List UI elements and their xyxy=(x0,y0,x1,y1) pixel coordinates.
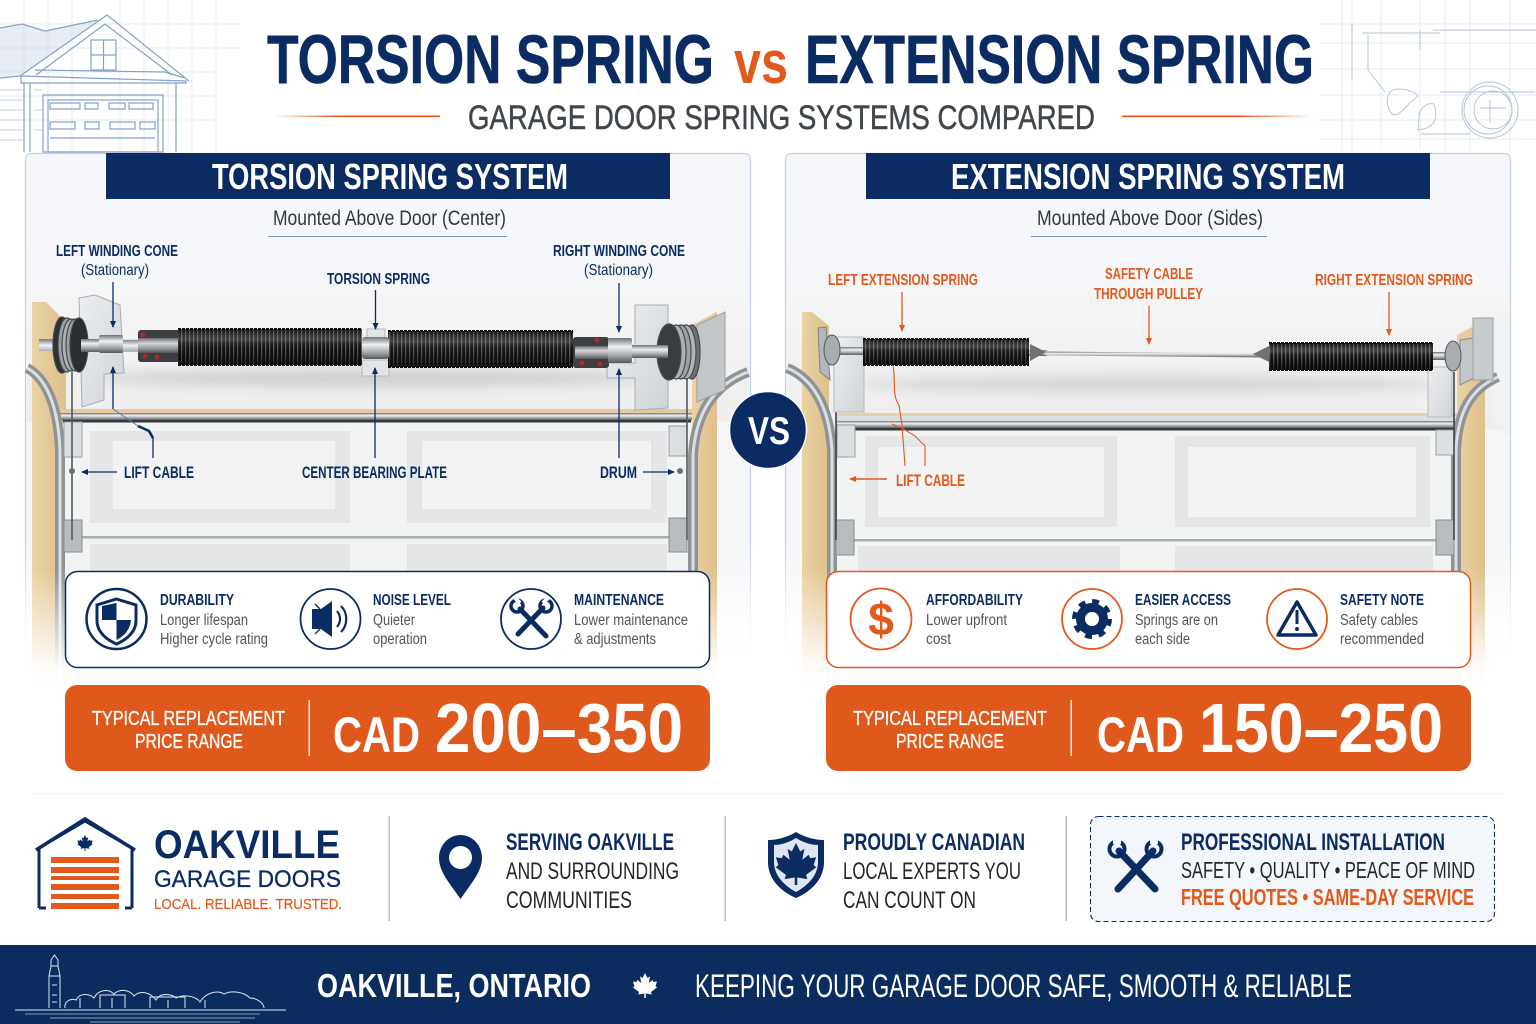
subtitle: GARAGE DOOR SPRING SYSTEMS COMPARED xyxy=(468,99,1095,137)
label: center bearing plate: CENTER BEARING PLATE xyxy=(302,464,447,482)
feature card: torsion benefits xyxy=(66,572,710,668)
label: left winding cone xyxy=(56,243,178,409)
label: safety cable through pulley: THROUGH PULLEY xyxy=(1094,286,1203,303)
text: easier access: Springs are on xyxy=(1135,612,1218,629)
text: maintenance: MAINTENANCE xyxy=(574,592,664,609)
icon: wrench and screwdriver xyxy=(501,589,561,649)
price bar: extension: 150–250 xyxy=(1199,689,1443,767)
icon: shield xyxy=(86,589,146,649)
label: lift cable: LIFT CABLE xyxy=(124,464,194,482)
text: durability: DURABILITY xyxy=(160,592,234,609)
callouts: torsion labels and arrows xyxy=(56,243,685,482)
text: safety note xyxy=(1340,592,1424,648)
text: affordability: cost xyxy=(926,631,952,648)
label: left extension spring: LEFT EXTENSION SPRING xyxy=(828,272,978,289)
shaft xyxy=(39,339,690,357)
logo: Oakville Garage Doors: LOCAL. RELIABLE. TRUSTED. xyxy=(154,896,342,913)
springs and rod xyxy=(824,335,1461,371)
label: lift cable xyxy=(850,365,965,490)
service area: serving Oakville: COMMUNITIES xyxy=(506,887,632,914)
text: safety note: Safety cables xyxy=(1340,612,1418,629)
price bar: torsion: TYPICAL REPLACEMENT xyxy=(92,708,285,730)
text: easier access: each side xyxy=(1135,631,1190,648)
icon: speaker xyxy=(300,589,360,649)
mounting brackets xyxy=(834,337,864,412)
text: maintenance xyxy=(574,592,688,648)
torsion spring coils xyxy=(178,329,573,367)
door side brackets xyxy=(64,372,687,552)
price bar: extension: PRICE RANGE xyxy=(896,731,1004,753)
text: safety note: recommended xyxy=(1340,631,1424,648)
text: noise level: operation xyxy=(373,631,427,648)
blueprint sketch: mechanical drawing top right xyxy=(1320,0,1536,150)
subheading: mounted sides: Mounted Above Door (Sides) xyxy=(1037,207,1263,230)
callout: professional installation xyxy=(1090,816,1494,922)
photo: torsion hardware above door xyxy=(26,270,750,692)
label: left winding cone: (Stationary) xyxy=(81,262,149,279)
label: torsion spring xyxy=(327,271,430,329)
text: affordability xyxy=(926,592,1023,648)
title: EXTENSION SPRING xyxy=(805,21,1314,98)
right drum xyxy=(630,324,700,380)
label: right winding cone xyxy=(553,243,685,332)
label: drum xyxy=(600,369,674,482)
service area: serving Oakville: SERVING OAKVILLE xyxy=(506,829,674,856)
label: lift cable xyxy=(82,409,194,482)
price bar: extension: CAD xyxy=(1097,707,1184,763)
text: maintenance: Lower maintenance xyxy=(574,612,688,629)
icon: crossed tools xyxy=(1110,838,1162,889)
text: durability: Higher cycle rating xyxy=(160,631,268,648)
icon: garage house xyxy=(36,819,135,909)
price bar: torsion: CAD xyxy=(333,707,420,763)
logo: Oakville Garage Doors: OAKVILLE xyxy=(154,823,340,867)
icon: warning triangle xyxy=(1267,589,1327,649)
title xyxy=(267,21,1314,98)
door panels xyxy=(60,431,690,604)
footer band: OAKVILLE, ONTARIO xyxy=(317,967,591,1004)
icon: dollar sign: $ xyxy=(868,593,894,645)
left drum xyxy=(53,317,104,373)
label: torsion spring: TORSION SPRING xyxy=(327,271,430,288)
header bar: torsion: TORSION SPRING SYSTEM xyxy=(212,156,568,197)
text: affordability: AFFORDABILITY xyxy=(926,592,1023,609)
footer band xyxy=(0,945,1536,1024)
label: right winding cone: (Stationary) xyxy=(584,262,653,279)
icon: map pin xyxy=(439,835,482,899)
proudly Canadian: LOCAL EXPERTS YOU xyxy=(843,858,1021,885)
callouts: extension labels and arrows xyxy=(828,266,1473,490)
proudly Canadian: CAN COUNT ON xyxy=(843,887,976,914)
winding cones xyxy=(99,330,632,368)
curved track right xyxy=(693,372,748,692)
title: TORSION SPRING xyxy=(267,21,714,98)
price bar: torsion xyxy=(65,685,710,771)
text: noise level: NOISE LEVEL xyxy=(373,592,451,609)
door side brackets xyxy=(836,372,1454,555)
price bar: extension xyxy=(826,685,1471,771)
illustration: lighthouse and shoreline xyxy=(15,955,286,1022)
text: easier access: EASIER ACCESS xyxy=(1135,592,1231,609)
subheading: mounted center: Mounted Above Door (Center) xyxy=(273,207,506,230)
door panels xyxy=(835,436,1445,606)
proudly Canadian xyxy=(768,829,1025,914)
text: durability xyxy=(160,592,268,648)
logo: Oakville Garage Doors: GARAGE DOORS xyxy=(154,866,341,893)
panel: extension spring system xyxy=(786,154,1510,694)
icon: shield with maple leaf xyxy=(768,832,824,898)
price bar: torsion: 200–350 xyxy=(435,689,683,767)
text: safety note: SAFETY NOTE xyxy=(1340,592,1424,609)
text: maintenance: & adjustments xyxy=(574,631,656,648)
label: drum: DRUM xyxy=(600,464,637,482)
icon: dollar sign xyxy=(850,588,912,650)
title: vs xyxy=(734,29,788,96)
label: safety cable through pulley xyxy=(1094,266,1203,344)
icon: gear xyxy=(1062,589,1122,649)
text: noise level: Quieter xyxy=(373,612,415,629)
photo: extension hardware above door xyxy=(786,270,1510,692)
blueprint sketch: house top left xyxy=(0,0,240,152)
price bar: torsion: PRICE RANGE xyxy=(135,731,243,753)
label: lift cable: LIFT CABLE xyxy=(896,471,965,490)
price bar: extension: TYPICAL REPLACEMENT xyxy=(853,708,1047,730)
logo: Oakville Garage Doors xyxy=(36,819,342,913)
service area: serving Oakville: AND SURROUNDING xyxy=(506,858,679,885)
label: right winding cone: RIGHT WINDING CONE xyxy=(553,243,685,260)
label: safety cable through pulley: SAFETY CABLE xyxy=(1105,266,1193,283)
feature card: extension benefits xyxy=(826,572,1470,668)
panel: torsion spring system xyxy=(26,154,750,694)
text: noise level xyxy=(373,592,451,648)
curved track left xyxy=(27,368,60,692)
text: durability: Longer lifespan xyxy=(160,612,248,629)
text: easier access xyxy=(1135,592,1231,648)
icon: maple leaf xyxy=(633,973,657,998)
proudly Canadian: PROUDLY CANADIAN xyxy=(843,829,1025,856)
header bar: extension: EXTENSION SPRING SYSTEM xyxy=(951,156,1345,197)
mounting brackets xyxy=(79,295,124,407)
VS badge xyxy=(730,392,806,468)
curved tracks xyxy=(787,368,1498,692)
VS badge: VS xyxy=(748,410,790,453)
service area: serving Oakville xyxy=(439,829,679,914)
label: right extension spring: RIGHT EXTENSION SPRING xyxy=(1315,272,1473,289)
label: left winding cone: LEFT WINDING CONE xyxy=(56,243,178,260)
text: affordability: Lower upfront xyxy=(926,612,1008,629)
